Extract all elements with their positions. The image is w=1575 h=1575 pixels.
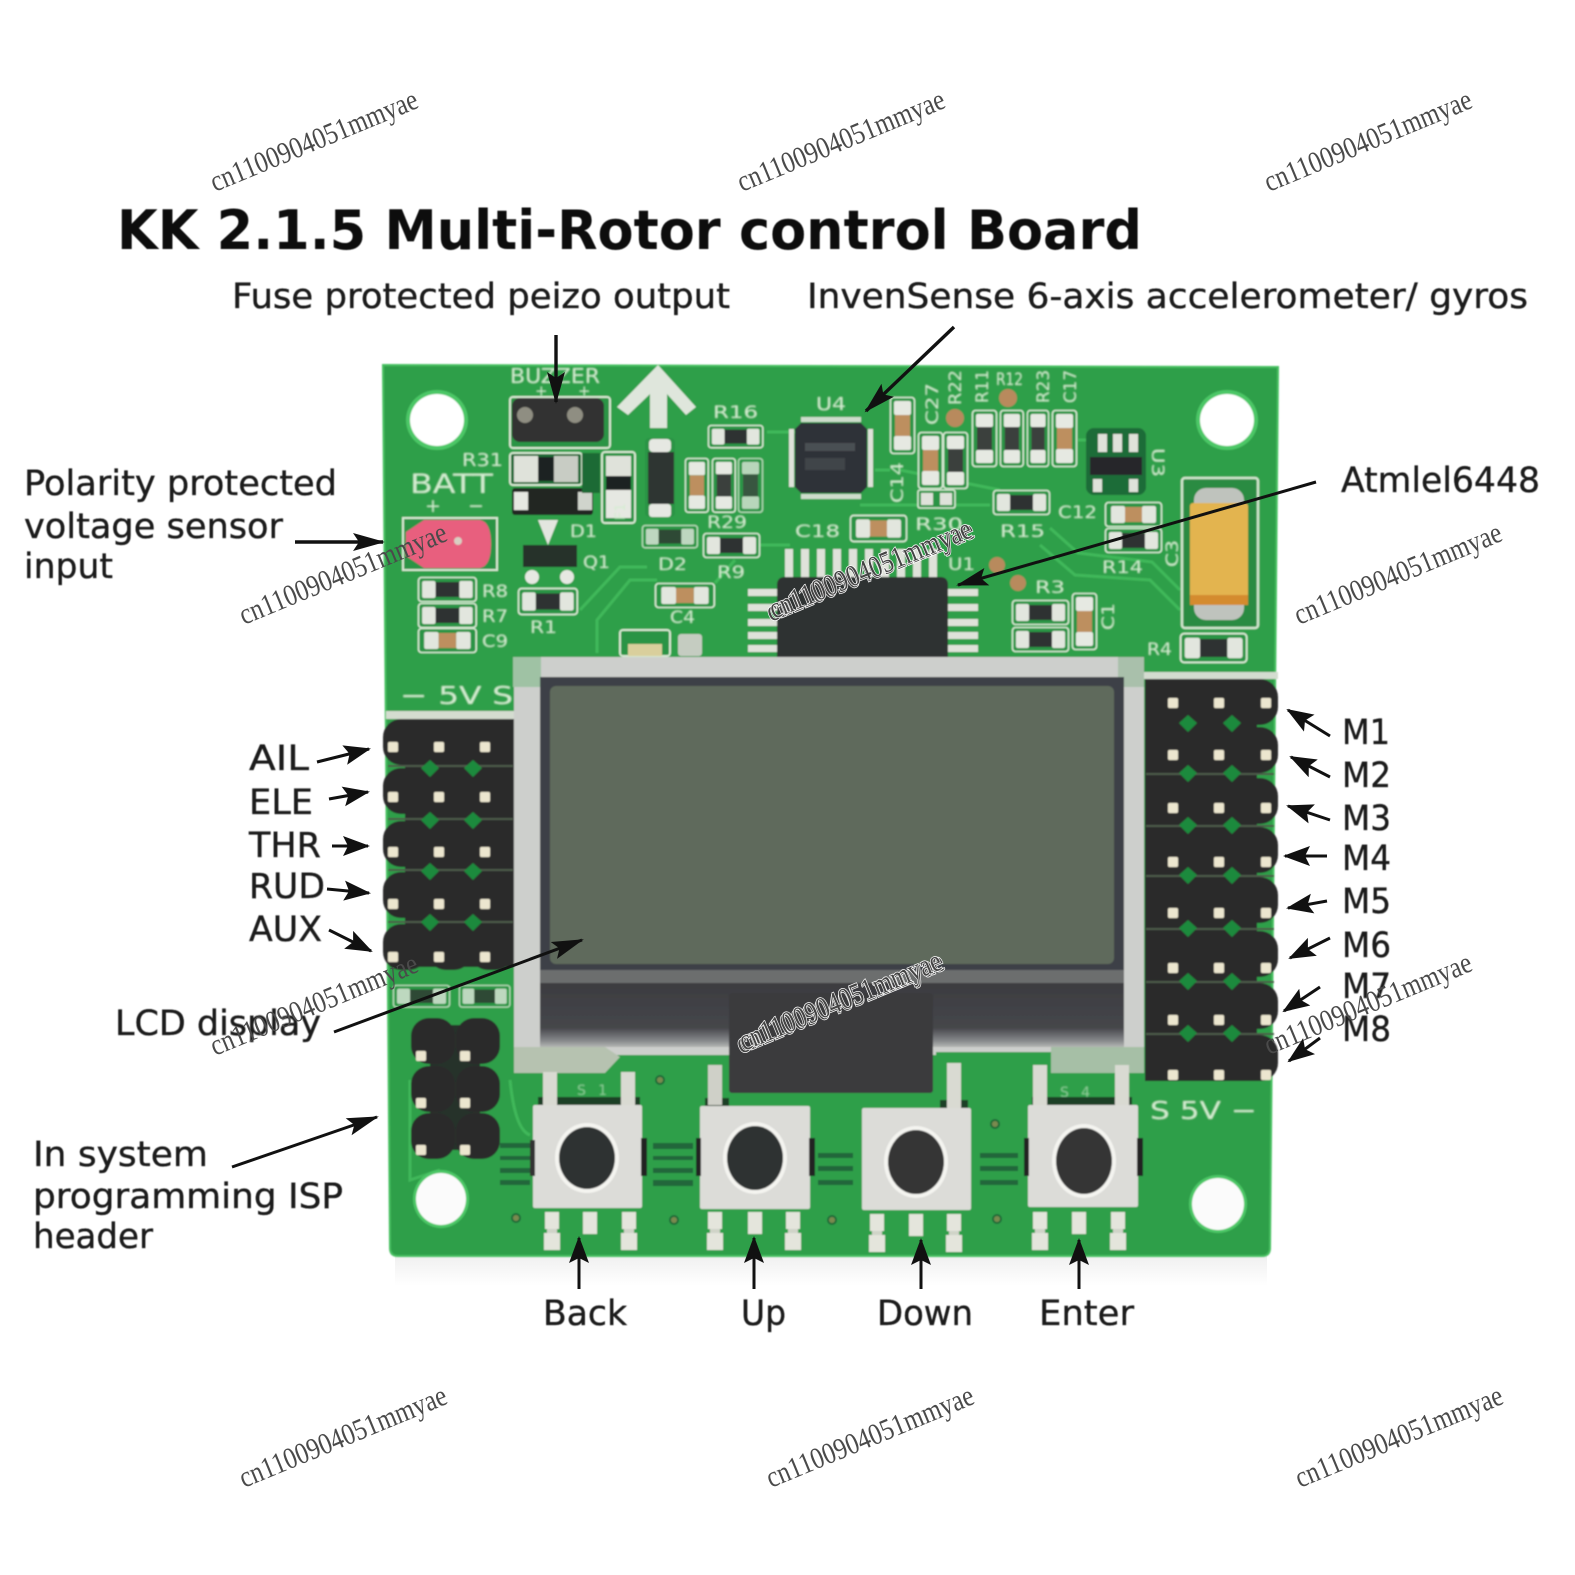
arrow: Atmel chip: [958, 482, 1316, 585]
silkscreen labels: +: [535, 382, 548, 400]
silkscreen labels: U3: [1147, 448, 1167, 477]
watermark row 4: cn1100904051mmyae: [761, 1379, 979, 1494]
C14 capacitor: [890, 398, 914, 454]
U1 pins top: [785, 549, 937, 579]
C4 capacitor: [656, 584, 714, 608]
board shadow: [395, 1256, 1267, 1286]
label: LCD display: LCD display: [115, 1004, 321, 1044]
label: M1: M1: [1342, 713, 1390, 753]
silkscreen labels: +: [578, 382, 591, 400]
label: polarity protected voltage sensor input: input: [24, 547, 113, 587]
watermark row 4: [234, 1379, 1508, 1494]
R31 resistor: [510, 453, 582, 485]
label: M6: M6: [1342, 926, 1391, 966]
silkscreen labels: U4: [816, 394, 846, 415]
vias: [512, 1076, 1001, 1224]
silkscreen labels: R3: [1035, 578, 1065, 598]
silkscreen labels: C12: [1058, 503, 1097, 523]
silkscreen labels: R30: [915, 515, 963, 535]
silkscreen labels: C14: [888, 462, 908, 503]
arrow: M5: [1288, 901, 1327, 908]
watermark row 3: cn1100904051mmyae: [731, 945, 949, 1060]
silkscreen labels: R14: [1102, 558, 1143, 578]
watermark row 2: cn1100904051mmyae: [764, 512, 976, 625]
LCD lower divider: [540, 970, 1124, 983]
arrow: AIL: [317, 749, 369, 762]
arrow: Down: [920, 1240, 922, 1289]
watermark row 1: cn1100904051mmyae: [1259, 83, 1477, 198]
resistor row left: [685, 458, 762, 512]
silkscreen labels: C27: [923, 383, 943, 425]
dark ground area: [582, 453, 600, 493]
C1 capacitor: [1072, 594, 1096, 650]
R15 resistor: [994, 490, 1050, 514]
R9 resistor: [704, 534, 760, 558]
label: M2: M2: [1342, 756, 1391, 796]
silkscreen labels: R29: [707, 513, 747, 533]
arrow: Up: [752, 1238, 756, 1289]
arrow: M2: [1291, 757, 1330, 777]
mounting hole: bottom left: [413, 1170, 469, 1228]
silkscreen labels: R11: [973, 370, 993, 403]
label: AUX: AUX: [249, 910, 322, 950]
label: polarity protected voltage sensor input: voltage sensor: [24, 507, 284, 547]
silkscreen labels: R12: [996, 370, 1023, 390]
watermark row 1: cn1100904051mmyae: [205, 83, 423, 198]
LCD screen: [550, 686, 1114, 964]
arrow: M8: [1289, 1038, 1320, 1061]
U4 IMU chip: [789, 417, 873, 499]
R14 resistor: [1106, 528, 1162, 552]
C9 capacitor: [419, 628, 476, 652]
silkscreen labels: R16: [713, 403, 758, 423]
flex cable: [729, 993, 933, 1093]
mounting hole: top left: [406, 390, 468, 450]
arrow: voltage sensor: [295, 540, 383, 544]
arrow: ISP header: [232, 1117, 377, 1167]
label: Up: Up: [741, 1294, 786, 1334]
C12 capacitor: [1106, 502, 1162, 526]
arrow: AUX: [329, 930, 371, 951]
label: M4: M4: [1342, 839, 1391, 879]
right motor header M1-M8: [1144, 672, 1278, 1081]
arrows: [232, 327, 1330, 1289]
arrow: M1: [1288, 710, 1330, 736]
R30 pads: [918, 490, 955, 508]
label: M7: M7: [1342, 967, 1391, 1007]
mounting hole: bottom right: [1189, 1175, 1247, 1233]
D3 diode: [645, 438, 675, 517]
silkscreen labels: BUZZER: [510, 364, 600, 388]
arrow: M7: [1284, 987, 1320, 1011]
board forward arrow: [617, 365, 696, 428]
copper pads: [946, 389, 1026, 591]
R1 resistor: [519, 589, 577, 614]
button: Up: [696, 1065, 815, 1250]
green area under LCD: [936, 1052, 1051, 1100]
silkscreen labels: [400, 364, 1257, 1125]
button: Down: [862, 1063, 971, 1252]
watermark row 3: cn1100904051mmyae: [205, 947, 423, 1062]
R2 resistor: [1012, 628, 1068, 652]
watermark row 4: cn1100904051mmyae: [234, 1379, 452, 1494]
label: M3: M3: [1342, 799, 1391, 839]
watermark row 2: cn1100904051mmyae: [234, 516, 452, 631]
silkscreen labels: R23: [1034, 370, 1054, 403]
arrow: Back: [578, 1238, 580, 1289]
arrow: LCD display: [334, 940, 582, 1032]
silkscreen labels: Q1: [583, 553, 610, 573]
LCD dark frame: [540, 677, 1124, 970]
label: AIL: AIL: [249, 739, 310, 779]
silkscreen labels: C3: [1163, 540, 1183, 567]
label: In system programming ISP header: In system: [33, 1135, 208, 1175]
silkscreen labels: R15: [1000, 522, 1045, 542]
arrow: M4: [1285, 854, 1327, 858]
watermark row 2: cn1100904051mmyae: [761, 513, 979, 628]
label: InvenSense: InvenSense 6-axis accelerometer/ gyros: [807, 277, 1528, 317]
silkscreen labels: D1: [570, 522, 597, 542]
label: In system programming ISP header: header: [33, 1217, 154, 1257]
U1 microcontroller: [777, 577, 948, 660]
tantalum capacitor: [1182, 478, 1258, 628]
button: Back: [530, 1072, 647, 1250]
silkscreen labels: S1: [577, 1083, 607, 1099]
label: M5: M5: [1342, 882, 1391, 922]
silkscreen labels: R31: [462, 450, 503, 471]
watermark row 3: cn1100904051mmyae: [1259, 946, 1477, 1061]
silkscreen labels: C18: [795, 522, 840, 542]
silkscreen labels: D2: [658, 555, 687, 575]
silkscreen labels: C1: [1099, 603, 1119, 630]
buzzer header: [510, 397, 610, 448]
LCD module: [513, 657, 1144, 1073]
watermark row 3: [205, 944, 1477, 1062]
silkscreen labels: S 5V −: [1150, 1096, 1257, 1125]
resistor row right: [972, 410, 1076, 466]
watermark row 3: cn1100904051mmyae: [734, 944, 946, 1057]
R4 resistor: [1181, 634, 1247, 662]
label: M8: M8: [1342, 1010, 1391, 1050]
crystal component: [620, 630, 702, 656]
silkscreen labels: BATT: [410, 469, 494, 500]
LCD bezel translucent corner: [513, 657, 1144, 687]
R7 resistor: [419, 604, 476, 628]
label: ELE: ELE: [249, 783, 313, 823]
silkscreen labels: R7: [482, 607, 508, 627]
watermark row 4: cn1100904051mmyae: [1290, 1379, 1508, 1494]
silkscreen labels: R22: [946, 370, 966, 405]
silkscreen labels: R8: [482, 582, 508, 602]
label: Fuse protected peizo output: Fuse protected peizo output: [232, 277, 730, 317]
arrow: M3: [1288, 806, 1330, 820]
silkscreen labels: −: [468, 495, 484, 517]
watermark row 1: cn1100904051mmyae: [732, 83, 950, 198]
watermark row 2: [234, 512, 1507, 631]
arrow: RUD: [327, 889, 369, 893]
silkscreen labels: R9: [717, 563, 745, 583]
button trace stripes: [500, 1143, 1018, 1186]
label: Back: Back: [543, 1294, 628, 1334]
watermark row 2: cn1100904051mmyae: [1289, 516, 1507, 631]
LCD lower glass: [540, 983, 1124, 1047]
title: KK 2.1.5 Multi-Rotor control Board: [117, 199, 1142, 262]
arrow: IMU: [866, 327, 954, 411]
silkscreen labels: C4: [670, 608, 695, 628]
silkscreen labels: − 5V S: [400, 681, 513, 710]
label: Down: Down: [877, 1294, 973, 1334]
F1 fuse: [602, 452, 635, 523]
label: Atmlel6448: Atmlel6448: [1341, 461, 1540, 501]
label: In system programming ISP header: programming ISP: [33, 1177, 343, 1217]
arrow: THR: [332, 844, 368, 848]
Q1 transistor: [523, 520, 577, 584]
labels: [24, 277, 1540, 1334]
arrow: ELE: [329, 792, 368, 799]
arrow: Enter: [1078, 1240, 1080, 1289]
R16 resistor: [708, 425, 763, 448]
silkscreen labels: C17: [1061, 370, 1081, 403]
silkscreen labels: F1: [613, 503, 629, 520]
R8 resistor: [419, 578, 476, 602]
copper traces: [410, 432, 1180, 1180]
silkscreen labels: +: [425, 495, 441, 517]
board outline: [383, 365, 1278, 1256]
label: In system programming ISP header: [33, 1135, 343, 1257]
R29 resistor: [642, 525, 697, 548]
LCD bezel: [514, 657, 1144, 1055]
pink battery connector: [403, 518, 497, 570]
R3 resistor: [1012, 600, 1068, 624]
D1 diode: [512, 488, 593, 515]
silkscreen labels: R1: [530, 618, 557, 638]
silkscreen labels: U1: [948, 555, 975, 575]
label: polarity protected voltage sensor input: Polarity protected: [24, 464, 337, 504]
small resistors under signal header: [394, 985, 510, 1007]
arrow: M6: [1290, 938, 1330, 958]
left receiver header: [383, 711, 514, 970]
silkscreen labels: R4: [1147, 640, 1172, 660]
watermarks: [205, 83, 1508, 1494]
label: THR: THR: [248, 826, 321, 866]
label: RUD: RUD: [249, 867, 325, 907]
silkscreen labels: C9: [482, 632, 508, 652]
mounting hole: top right: [1196, 390, 1258, 450]
U3 regulator: [1086, 428, 1146, 495]
U1 pins sides: [748, 589, 978, 652]
button: Enter: [1024, 1065, 1143, 1250]
panel: PCB board photo: [383, 364, 1278, 1256]
watermark row 1: [205, 83, 1477, 198]
silkscreen labels: S4: [1060, 1085, 1090, 1101]
label: Enter: Enter: [1039, 1294, 1135, 1334]
C18 capacitor: [850, 516, 906, 541]
arrow: buzzer: [554, 335, 558, 402]
ISP header: [411, 1018, 500, 1159]
capacitor and resistor pair: [918, 432, 968, 488]
label: polarity protected voltage sensor input: [24, 464, 337, 587]
LCD bezel lower clear edge: [514, 1047, 1144, 1073]
